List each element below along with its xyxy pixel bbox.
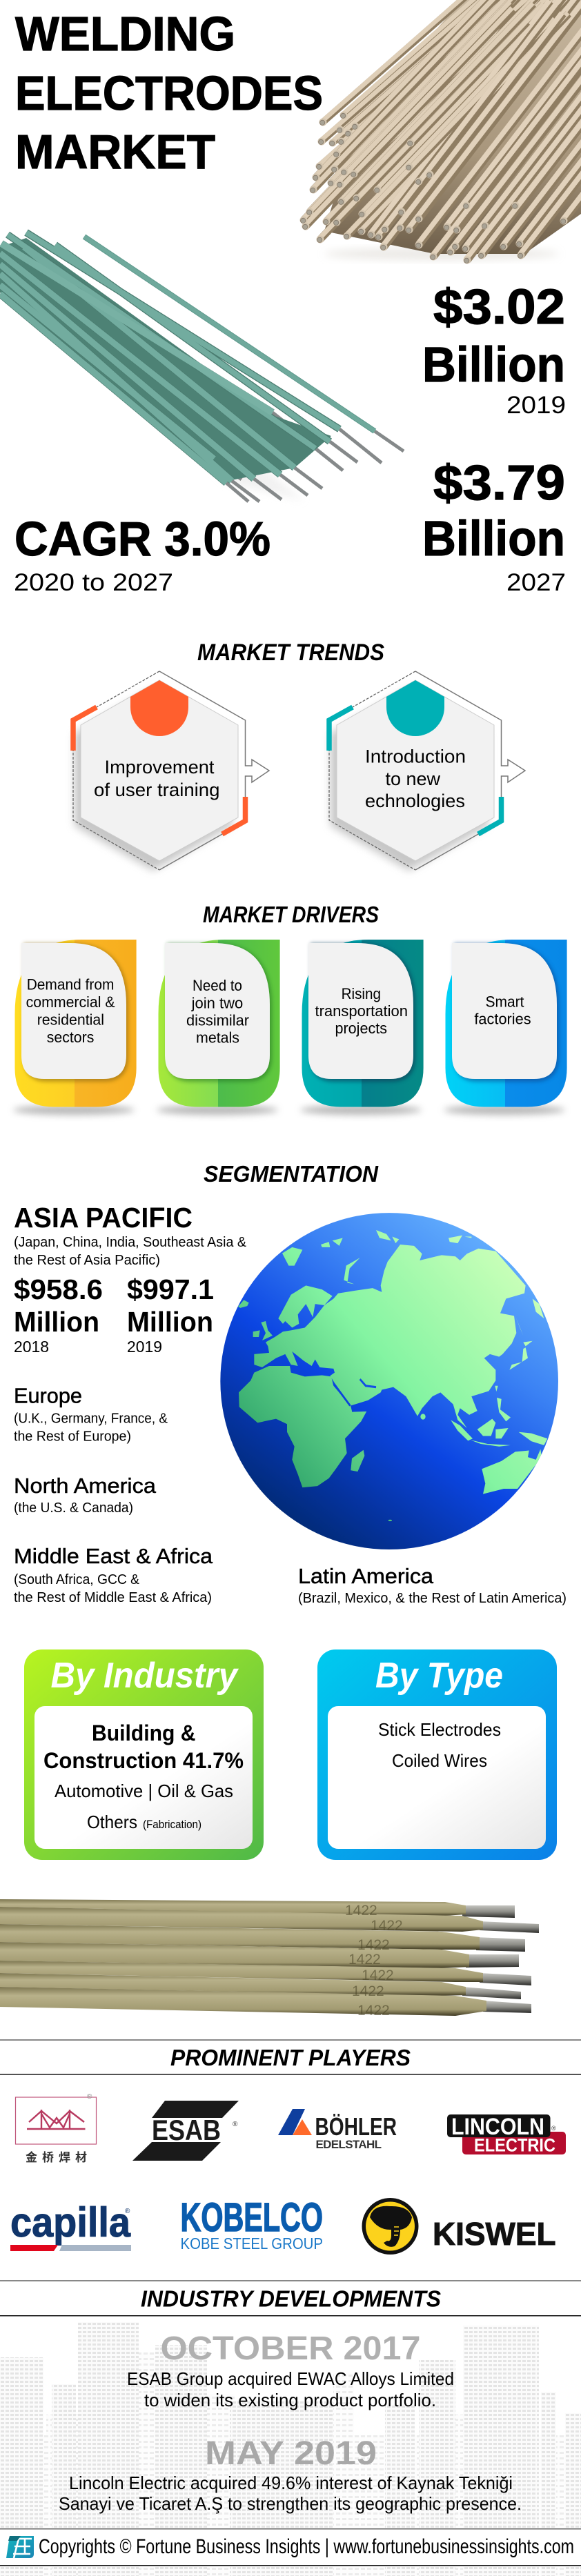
image: khaki electrode bundle: 1422 bbox=[371, 1918, 403, 1934]
heading: prominent players: PROMINENT PLAYERS bbox=[170, 2045, 411, 2070]
logo: Kobelco: KOBELCO bbox=[181, 2195, 323, 2240]
region: Europe: the Rest of Europe) bbox=[14, 1429, 131, 1445]
region: Middle East and Africa: (South Africa, GCC & bbox=[14, 1572, 140, 1587]
stat: 2027 market value: $3.79 bbox=[433, 456, 565, 511]
stat: 2019 market value: $3.02 bbox=[433, 280, 565, 335]
development: October 2017: to widen its existing product portfolio. bbox=[144, 2390, 436, 2410]
panel: trend 1 hexagon bbox=[73, 671, 269, 871]
development: May 2019: Lincoln Electric acquired 49.6% interest of Kaynak Tekniği bbox=[69, 2473, 513, 2493]
image: green electrode rods bbox=[0, 232, 404, 502]
region: North America: (the U.S. & Canada) bbox=[14, 1500, 133, 1516]
heading: market trends: MARKET TRENDS bbox=[197, 640, 384, 666]
panel: driver 3: transportation bbox=[315, 1002, 408, 1020]
image: khaki electrode bundle: 1422 bbox=[357, 1937, 390, 1953]
region: Middle East and Africa: Middle East & Africa bbox=[14, 1544, 213, 1568]
development: May 2019: MAY 2019 bbox=[205, 2435, 377, 2472]
logo: Jinqiao: ® bbox=[87, 2093, 92, 2101]
region: Asia Pacific: 2019 bbox=[127, 1338, 162, 1356]
panel: driver 1: commercial & bbox=[26, 993, 115, 1011]
stat: CAGR: 2020 to 2027 bbox=[14, 569, 173, 596]
stat: 2019 market value: Billion bbox=[422, 338, 565, 393]
city skyline background bbox=[0, 2322, 581, 2576]
stat: 2027 market value: 2027 bbox=[506, 569, 566, 596]
logo: Jinqiao bbox=[15, 2093, 97, 2164]
logo: ESAB bbox=[132, 2101, 239, 2161]
panel: by industry: Construction 41.7% bbox=[43, 1748, 244, 1773]
title: ELECTRODES bbox=[15, 66, 323, 120]
image: khaki electrode bundle bbox=[0, 1899, 539, 2019]
logo: Capilla: ® bbox=[125, 2208, 130, 2215]
logo: Lincoln Electric: ELECTRIC bbox=[474, 2134, 555, 2155]
image: tan electrode rods bbox=[299, 0, 581, 264]
region: Europe: (U.K., Germany, France, & bbox=[14, 1411, 168, 1427]
panel: trend 2 hexagon: echnologies bbox=[365, 791, 465, 811]
panel: driver 3 bbox=[300, 940, 424, 1115]
logo: Bohler Edelstahl bbox=[278, 2109, 397, 2151]
logo: Jinqiao: 金桥焊材 bbox=[26, 2150, 87, 2164]
panel: driver 2: join two bbox=[191, 995, 243, 1012]
region: Asia Pacific: 2018 bbox=[14, 1338, 49, 1356]
panel: driver 4 bbox=[444, 940, 567, 1115]
logo: Kiswel: KISWEL bbox=[433, 2216, 556, 2252]
development: October 2017 bbox=[127, 2330, 454, 2410]
logo: Bohler Edelstahl: BÖHLER bbox=[315, 2112, 397, 2141]
panel: driver 3: Rising bbox=[342, 985, 381, 1002]
logo: Lincoln Electric bbox=[447, 2114, 566, 2155]
region: Asia Pacific: Million bbox=[127, 1306, 213, 1338]
stat: 2027 market value bbox=[422, 456, 566, 596]
region: Asia Pacific: (Japan, China, India, Southeast Asia & bbox=[14, 1235, 247, 1250]
panel: driver 3: projects bbox=[335, 1020, 387, 1037]
region: Middle East and Africa bbox=[14, 1544, 213, 1605]
development: October 2017: ESAB Group acquired EWAC Alloys Limited bbox=[127, 2368, 454, 2389]
logo: Kiswel bbox=[362, 2198, 556, 2255]
region: Asia Pacific: ASIA PACIFIC bbox=[14, 1202, 193, 1233]
panel: driver 2 bbox=[157, 940, 280, 1115]
region: Asia Pacific: Million bbox=[14, 1306, 99, 1338]
region: North America: North America bbox=[14, 1474, 157, 1498]
panel: driver 1: Demand from bbox=[27, 976, 114, 993]
panel: driver 2: metals bbox=[196, 1029, 239, 1047]
image: khaki electrode bundle: 1422 bbox=[348, 1952, 381, 1968]
panel: driver 1 bbox=[13, 940, 137, 1115]
image: khaki electrode bundle: 1422 bbox=[345, 1903, 377, 1919]
logo: Kobelco: KOBE STEEL GROUP bbox=[181, 2235, 323, 2252]
stat: 2019 market value bbox=[422, 280, 566, 419]
panel: by industry: By Industry bbox=[51, 1656, 239, 1696]
panel: by type: Stick Electrodes bbox=[378, 1719, 501, 1740]
stat: 2019 market value: 2019 bbox=[506, 392, 566, 419]
heading: market drivers: MARKET DRIVERS bbox=[203, 902, 379, 927]
logo: Lincoln Electric: LINCOLN bbox=[451, 2114, 544, 2140]
title bbox=[15, 7, 323, 179]
logo: Kobelco bbox=[181, 2195, 323, 2252]
panel: by industry bbox=[24, 1649, 264, 1860]
panel: by industry: Others bbox=[87, 1812, 137, 1832]
logo: ESAB: ESAB bbox=[152, 2114, 221, 2146]
region: Asia Pacific: $958.6 bbox=[14, 1274, 103, 1305]
heading: segmentation: SEGMENTATION bbox=[204, 1161, 379, 1187]
footer bbox=[0, 2528, 581, 2566]
region: Middle East and Africa: the Rest of Middle East & Africa) bbox=[14, 1590, 212, 1605]
panel: by industry: (Fabrication) bbox=[143, 1818, 201, 1831]
title: WELDING bbox=[15, 7, 235, 61]
image: khaki electrode bundle: 1422 bbox=[362, 1968, 394, 1983]
panel: trend 2 hexagon bbox=[329, 671, 525, 871]
panel: driver 1: residential bbox=[37, 1011, 104, 1029]
development: May 2019: Sanayi ve Ticaret A.Ş to strengthen its geographic presence. bbox=[59, 2493, 522, 2514]
panel: driver 4: Smart bbox=[486, 993, 524, 1011]
region: Latin America: (Brazil, Mexico, & the Rest of Latin America) bbox=[298, 1591, 567, 1606]
panel: trend 2 hexagon: Introduction bbox=[365, 746, 466, 767]
panel: trend 1 hexagon: Improvement bbox=[105, 757, 215, 777]
stat: 2027 market value: Billion bbox=[422, 512, 565, 566]
heading: industry developments: INDUSTRY DEVELOPMENTS bbox=[141, 2286, 441, 2311]
region: Asia Pacific: the Rest of Asia Pacific) bbox=[14, 1253, 160, 1268]
panel: by industry: Building & bbox=[92, 1721, 196, 1745]
region: Asia Pacific bbox=[14, 1202, 247, 1356]
logo: ESAB: ® bbox=[233, 2121, 238, 2128]
region: Europe bbox=[14, 1384, 168, 1445]
region: Latin America bbox=[298, 1564, 567, 1606]
panel: trend 2 hexagon: to new bbox=[385, 769, 440, 789]
image: khaki electrode bundle: 1422 bbox=[352, 1983, 384, 1999]
logo: Lincoln Electric: ® bbox=[551, 2125, 556, 2132]
region: Latin America: Latin America bbox=[298, 1564, 434, 1588]
panel: by type: Coiled Wires bbox=[392, 1750, 487, 1771]
panel: driver 4: factories bbox=[474, 1011, 531, 1028]
globe map bbox=[220, 1213, 558, 1549]
panel: by type: By Type bbox=[375, 1656, 503, 1696]
logo: Bohler Edelstahl: EDELSTAHL bbox=[316, 2138, 382, 2151]
icon: Fortune Business Insights logo bbox=[6, 2536, 34, 2558]
development: May 2019 bbox=[59, 2435, 522, 2514]
region: Asia Pacific: $997.1 bbox=[127, 1274, 214, 1305]
panel: driver 2: Need to bbox=[193, 977, 242, 994]
panel: trend 1 hexagon: of user training bbox=[94, 780, 219, 800]
panel: driver 1: sectors bbox=[47, 1029, 94, 1046]
region: Europe: Europe bbox=[14, 1384, 82, 1408]
development: October 2017: OCTOBER 2017 bbox=[160, 2330, 421, 2367]
stat: CAGR bbox=[14, 512, 270, 596]
panel: by industry: Automotive | Oil & Gas bbox=[55, 1781, 233, 1801]
stat: CAGR: CAGR 3.0% bbox=[14, 512, 270, 566]
region: North America bbox=[14, 1474, 157, 1516]
panel: driver 2: dissimilar bbox=[186, 1012, 249, 1029]
image: khaki electrode bundle: 1422 bbox=[357, 2003, 390, 2019]
panel: by type bbox=[317, 1649, 557, 1860]
logo: Capilla: capilla bbox=[10, 2199, 131, 2246]
title: MARKET bbox=[15, 125, 215, 179]
